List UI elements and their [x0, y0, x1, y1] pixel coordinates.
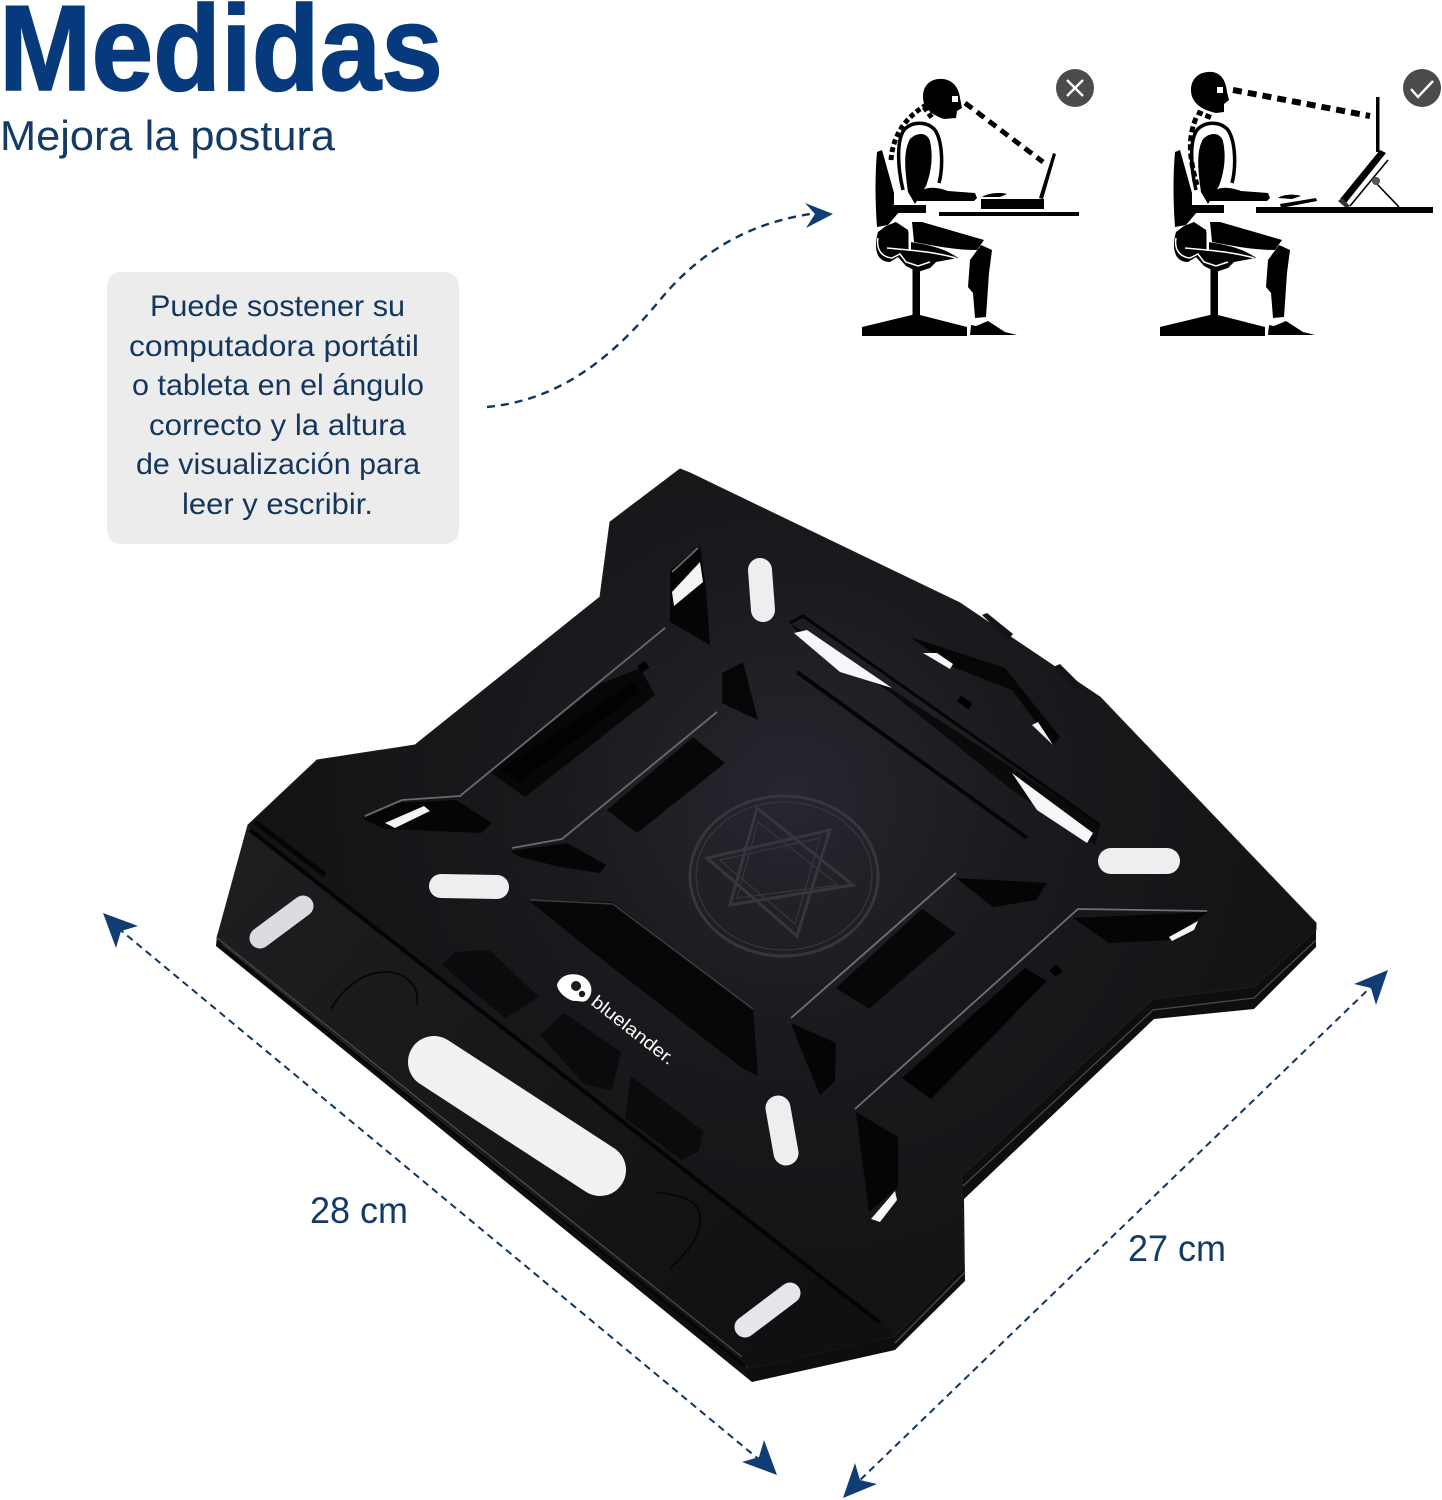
- dimension label: 28 cm: 28 cm: [310, 1190, 408, 1231]
- dimension label: 27 cm: 27 cm: [1128, 1228, 1226, 1269]
- dimension: 27 cm depth arrow: [843, 970, 1388, 1498]
- white pad slots: [260, 570, 1167, 1327]
- logo mark: [557, 974, 591, 1002]
- stand underside: [216, 923, 1316, 1382]
- upper right slit band: [790, 616, 1100, 845]
- centre left window: [510, 662, 758, 873]
- callout text: [129, 290, 424, 521]
- figure: correct posture with raised screen: [1160, 72, 1433, 336]
- right edge bumps: [982, 613, 1080, 690]
- callout text: o tableta en el ángulo: [132, 369, 424, 402]
- head: [923, 79, 962, 119]
- callout text: leer y escribir.: [182, 488, 373, 521]
- desk: [939, 212, 1079, 216]
- dimension: 28 cm width arrow: [103, 913, 777, 1475]
- callout text: Puede sostener su: [150, 290, 405, 323]
- laptop: [981, 153, 1056, 209]
- pad recess curves: [331, 972, 700, 1268]
- ridge line: [225, 822, 880, 1366]
- logo wordmark: bluelander.: [588, 991, 679, 1069]
- sight line: [1233, 90, 1370, 116]
- subtitle: Mejora la postura: [0, 112, 336, 159]
- front tab: [217, 826, 895, 1368]
- callout text: de visualización para: [136, 448, 420, 481]
- desk: [1256, 207, 1433, 213]
- product: laptop stand: [216, 469, 1316, 1382]
- keyboard and hand: [1278, 195, 1317, 208]
- sight line: [965, 103, 1043, 162]
- hex star emblem: [690, 796, 878, 956]
- callout: description panel: [107, 272, 459, 544]
- pockets behind ridge: [442, 950, 703, 1160]
- upper right small opening: [910, 637, 1060, 745]
- callout text: correcto y la altura: [149, 409, 406, 442]
- arrow: curved dashed arrow from callout to posture figures: [487, 203, 833, 407]
- callout text: computadora portátil: [129, 330, 419, 363]
- edge highlights: [217, 938, 1316, 1368]
- hand: [982, 193, 1007, 197]
- lower left long opening: [528, 900, 758, 1076]
- figure: incorrect posture with laptop: [862, 79, 1079, 336]
- raised screen on stand: [1338, 97, 1399, 208]
- lower right windows: [791, 873, 1207, 1222]
- brand logo: [557, 974, 679, 1069]
- head: [1191, 72, 1229, 113]
- stand top surface: [217, 469, 1316, 1368]
- badge: incorrect: [1056, 69, 1094, 107]
- upper left openings: [363, 546, 710, 833]
- spine dashes: [1190, 112, 1212, 185]
- callout background: [107, 272, 459, 544]
- badge: correct: [1403, 69, 1441, 107]
- spine dashes: [891, 105, 932, 160]
